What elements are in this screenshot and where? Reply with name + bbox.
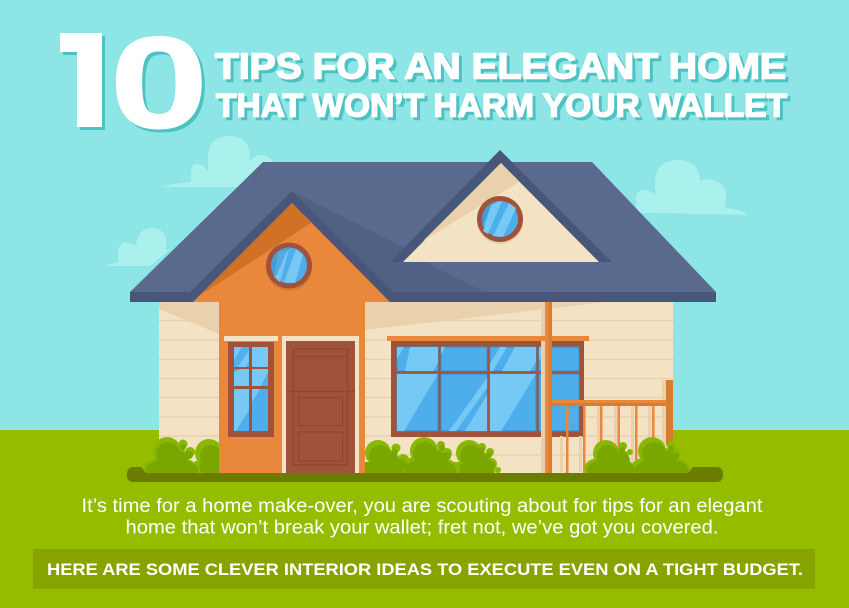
window glare: [397, 347, 546, 431]
left window: [224, 336, 278, 437]
window sill: [387, 336, 589, 341]
orange front section: [219, 300, 365, 473]
big number 10: 1: [49, 9, 121, 155]
grass ground: [0, 430, 849, 608]
right post: [666, 380, 673, 445]
orange gable: [193, 203, 390, 302]
big number 10: 0: [113, 12, 211, 158]
house: [127, 150, 723, 482]
title line 2: THAT WON’T HARM YOUR WALLET: [219, 90, 790, 126]
big number 10: [60, 33, 205, 132]
callout banner: [33, 549, 815, 589]
front door: [282, 336, 359, 473]
grass below strip: [140, 481, 710, 483]
title line 1: TIPS FOR AN ELEGANT HOME: [215, 46, 786, 86]
left gable band: [130, 191, 425, 302]
cloud: top left: [162, 136, 273, 187]
round gable window: [266, 242, 312, 291]
porch post shadows: [541, 302, 545, 473]
porch rail: [552, 400, 667, 406]
roof shadow: [292, 191, 487, 293]
ground strip: [127, 467, 723, 482]
house walls: [159, 300, 673, 473]
cloud: middle left: [104, 228, 172, 266]
callout banner: HERE ARE SOME CLEVER INTERIOR IDEAS TO EXECUTE EVEN ON A TIGHT BUDGET.: [47, 560, 803, 579]
gable shade: [199, 203, 311, 296]
large window: [387, 336, 589, 437]
dormer: [390, 150, 612, 262]
intro text: It’s time for a home make-over, you are scouting about for tips for an elegant: [82, 496, 763, 517]
bush: left of door: [143, 437, 219, 473]
sky background: [0, 0, 849, 431]
title line 2: THAT WON’T HARM YOUR WALLET: [216, 88, 787, 124]
main post: [545, 302, 552, 473]
bush: right of door: [365, 437, 501, 473]
intro text: home that won’t break your wallet; fret not, we’ve got you covered.: [126, 518, 718, 538]
bushes: [143, 437, 690, 473]
title line 1: TIPS FOR AN ELEGANT HOME: [218, 48, 789, 90]
roof: [130, 162, 716, 302]
cloud: right: [636, 160, 748, 215]
round dormer window: [477, 196, 523, 244]
intro text: [82, 496, 763, 538]
balusters: [566, 406, 654, 473]
big number 10: 0: [110, 10, 208, 156]
wall shadows under roof: [159, 302, 219, 334]
porch: [541, 302, 673, 473]
bush: porch: [584, 437, 690, 482]
title: [60, 33, 790, 132]
